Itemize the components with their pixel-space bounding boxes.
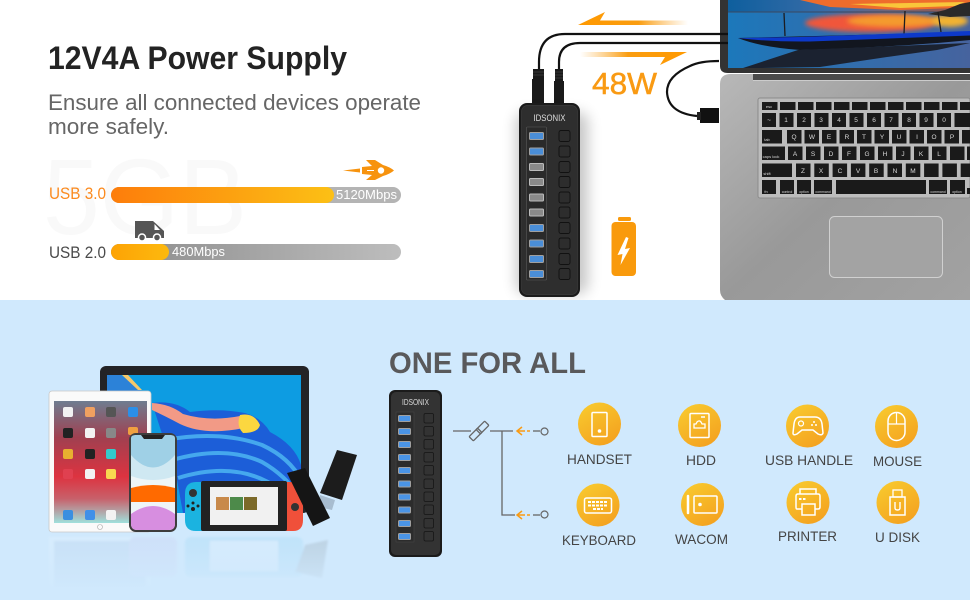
item: HDD: [678, 404, 721, 468]
keyboard: 4: [837, 117, 841, 124]
keyboard: command: [815, 190, 831, 194]
keyboard: 6: [872, 117, 876, 124]
bar: USB 2.0: 480Mbps: [172, 245, 225, 259]
keyboard: 9: [924, 117, 928, 124]
keyboard: B: [874, 168, 878, 175]
arrow: top connector: [517, 427, 548, 435]
item: keyboard: KEYBOARD: [562, 532, 636, 548]
hub shadow: [516, 112, 588, 294]
power plug left: [532, 69, 544, 103]
keyboard: Y: [880, 134, 885, 141]
keyboard: G: [864, 151, 870, 158]
item: handset: HANDSET: [567, 451, 632, 467]
text block: description: [48, 90, 421, 139]
label: 48W: 48W: [592, 67, 657, 101]
keyboard: fn: [764, 189, 768, 194]
heading: 12V4A Power Supply: 12V4A Power Supply: [48, 40, 347, 76]
item: mouse: [873, 405, 922, 469]
item: HDD: HDD: [686, 452, 716, 468]
cable: USB plug loop: [667, 61, 719, 116]
keyboard: control: [782, 190, 792, 194]
keyboard: U: [897, 134, 902, 141]
chart: USB speed comparison: [49, 160, 401, 262]
cable: top cable to hub: [539, 34, 728, 72]
keyboard: I: [916, 134, 918, 141]
keyboard: [758, 98, 970, 198]
keyboard: T: [862, 134, 866, 141]
arrow: power flow left: [578, 12, 688, 25]
keyboard: P: [950, 134, 954, 141]
keyboard: E: [827, 134, 832, 141]
item: wacom: [675, 483, 728, 547]
keyboard: D: [829, 151, 834, 158]
device reflection: [49, 537, 328, 587]
cable: second cable to hub: [559, 43, 728, 72]
keyboard: A: [793, 151, 798, 158]
keyboard: N: [893, 168, 898, 175]
icon: battery charging: [612, 217, 636, 276]
laptop: [720, 0, 970, 300]
keyboard: K: [919, 151, 924, 158]
keyboard: command: [930, 190, 946, 194]
bar: USB 2.0: [49, 244, 401, 262]
item: printer: [778, 481, 837, 544]
keyboard: M: [910, 168, 916, 175]
item: USB handle: USB HANDLE: [765, 452, 853, 468]
keyboard: esc: [766, 104, 772, 109]
item: keyboard: [562, 484, 636, 548]
panel: power supply background: [0, 0, 970, 300]
keyboard: V: [856, 168, 861, 175]
item: U disk: U DISK: [875, 529, 921, 545]
keyboard: F: [847, 151, 851, 158]
keyboard: R: [845, 134, 850, 141]
power plug right: [554, 69, 564, 103]
keyboard: C: [838, 168, 843, 175]
icon: truck: [135, 221, 164, 241]
panel: one for all background: [0, 300, 970, 600]
keyboard: 8: [907, 117, 911, 124]
device: usb drives: [287, 450, 357, 526]
device: game console: [185, 481, 303, 531]
icon: link: [469, 421, 489, 441]
watermark: 5GB: 5GB: [43, 136, 247, 257]
arrow: power flow right: [580, 52, 687, 65]
device group: [40, 366, 370, 594]
bar: USB 3.0: USB 3.0: [49, 185, 106, 203]
keyboard: 1: [784, 117, 788, 124]
laptop base: [720, 74, 970, 300]
item: wacom: WACOM: [675, 531, 728, 547]
item: mouse: MOUSE: [873, 453, 922, 469]
item: U disk: [875, 481, 921, 545]
keyboard: ~: [767, 117, 771, 124]
heading: ONE FOR ALL: ONE FOR ALL: [389, 347, 586, 380]
keyboard: caps lock: [763, 154, 779, 159]
keyboard: shift: [763, 171, 772, 176]
keyboard: tab: [764, 137, 771, 142]
keyboard: O: [931, 134, 937, 141]
bar: USB 3.0: 5120Mbps: [336, 188, 397, 202]
device: laptop: [100, 366, 309, 513]
keyboard: Z: [801, 168, 805, 175]
keyboard: L: [937, 151, 941, 158]
keyboard: S: [811, 151, 816, 158]
item: printer: PRINTER: [778, 528, 837, 544]
connector diagram: [453, 421, 548, 519]
item: USB handle: [765, 404, 853, 468]
hub: one for all panel: [389, 390, 442, 557]
keyboard: 0: [942, 117, 946, 124]
keyboard: 2: [802, 117, 806, 124]
keyboard: 5: [854, 117, 858, 124]
keyboard: Q: [791, 134, 797, 141]
device: phone: [129, 433, 177, 532]
bar: USB 2.0: USB 2.0: [49, 244, 106, 262]
keyboard: J: [901, 151, 905, 158]
keyboard: 7: [889, 117, 893, 124]
hub: power supply panel: [519, 103, 580, 297]
keyboard: option: [952, 190, 962, 194]
keyboard: H: [883, 151, 888, 158]
text block: description: Ensure all connected devices operate: [48, 90, 421, 115]
keyboard: option: [799, 190, 809, 194]
bar: USB 3.0: [49, 185, 401, 203]
icon: rocket: [343, 160, 394, 180]
hub: power supply panel: IDSONIX: [534, 113, 566, 123]
trackpad: [830, 216, 942, 278]
text block: description: more safely.: [48, 114, 169, 139]
keyboard: 3: [819, 117, 823, 124]
laptop screen: [720, 0, 970, 73]
arrow: bottom connector: [517, 511, 548, 519]
device: tablet: [49, 391, 151, 532]
keyboard: X: [819, 168, 824, 175]
cables: [539, 34, 728, 116]
keyboard: W: [809, 134, 816, 141]
usb plug on laptop: [697, 108, 719, 123]
hub: one for all panel: IDSONIX: [402, 398, 430, 407]
item: handset: [567, 402, 632, 467]
